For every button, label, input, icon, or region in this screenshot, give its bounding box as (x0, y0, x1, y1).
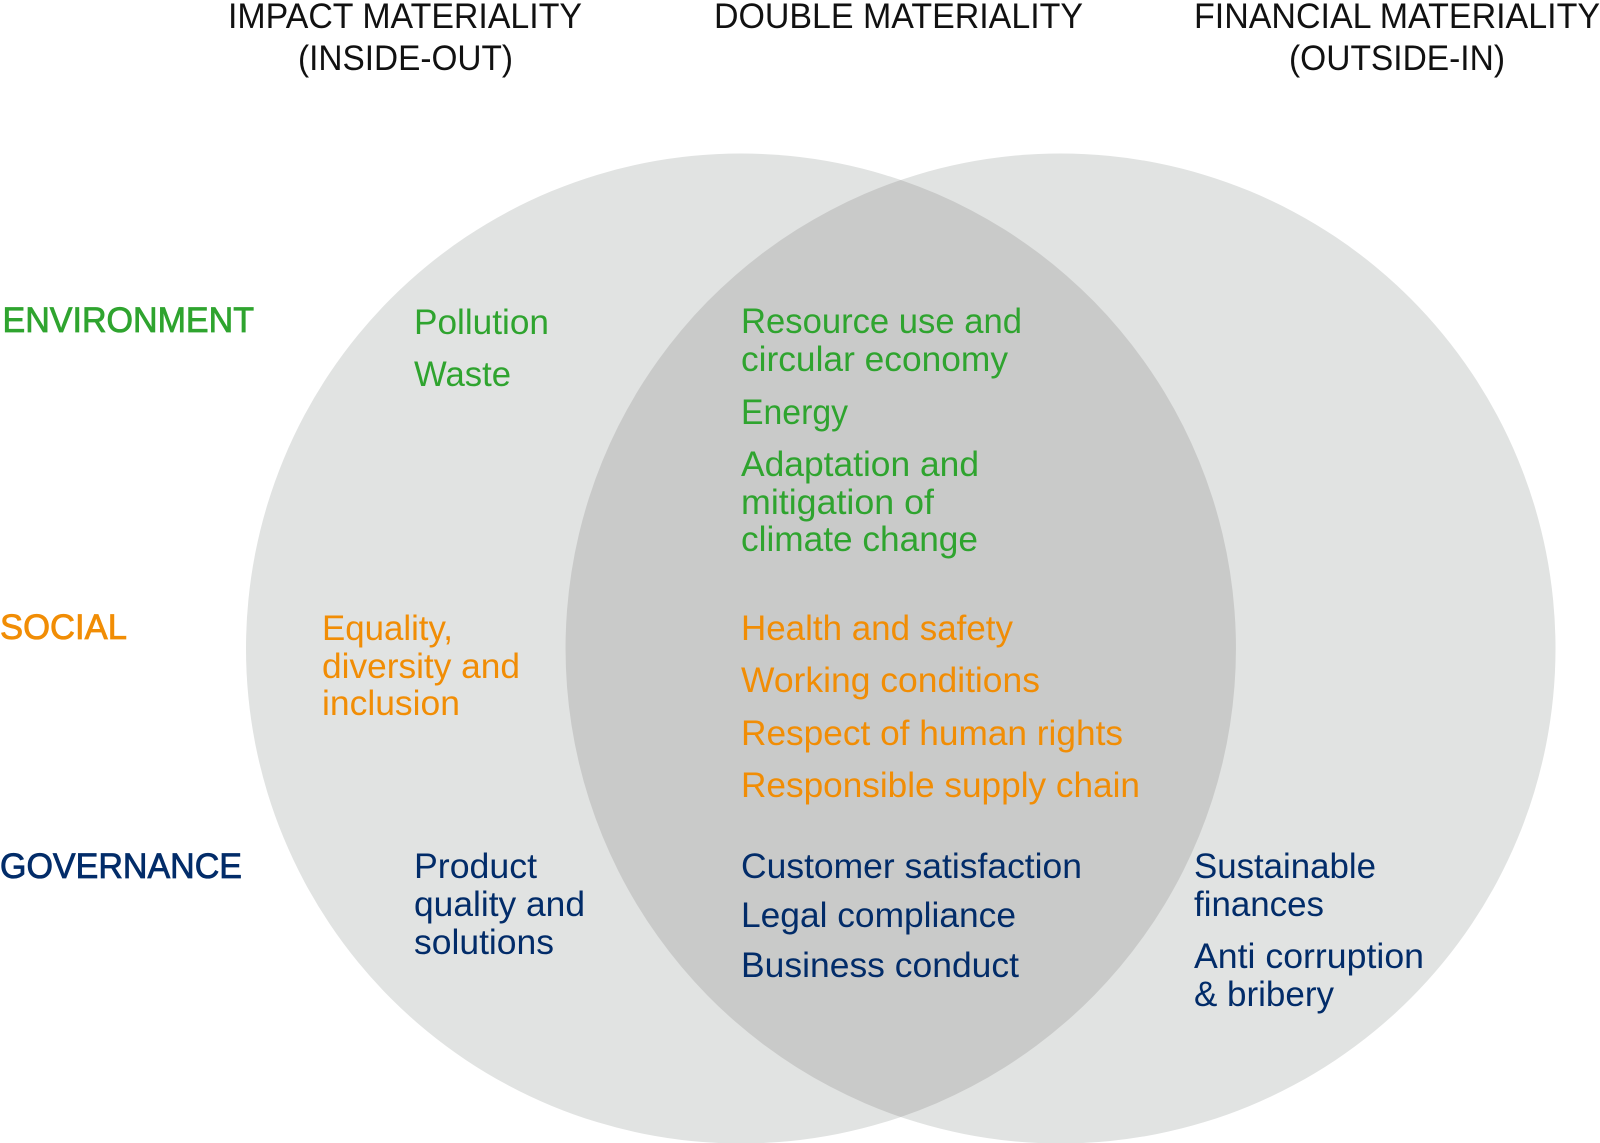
environment items: impact: Pollution (414, 303, 549, 342)
circle: financial materiality (566, 154, 1556, 1143)
row label: social: SOCIAL (0, 608, 127, 647)
governance items: financial: Sustainable (1194, 847, 1376, 886)
environment items: impact: Waste (414, 355, 511, 394)
governance items: financial: Anti corruption (1194, 937, 1424, 976)
social items: double: Responsible supply chain (741, 766, 1140, 805)
governance items: financial (1194, 847, 1424, 1014)
environment items: double: Resource use and (741, 302, 1022, 341)
environment items: double (741, 302, 1022, 559)
column heading: financial materiality (1194, 0, 1600, 78)
environment items: double: Energy (741, 393, 848, 432)
social items: double (741, 609, 1140, 805)
environment items: double: Adaptation and (741, 445, 979, 484)
column heading: impact materiality (228, 0, 582, 78)
social items: impact: inclusion (322, 684, 460, 723)
overlap: double materiality (566, 180, 1236, 1117)
circle: impact materiality (246, 154, 1236, 1143)
environment items: double: mitigation of (741, 483, 934, 522)
governance items: financial: & bribery (1194, 975, 1334, 1014)
environment items: double: climate change (741, 520, 978, 559)
column heading: financial materiality: (OUTSIDE-IN) (1289, 39, 1505, 78)
social items: impact: Equality, (322, 609, 453, 648)
governance items: impact: solutions (414, 923, 554, 962)
governance items: impact (414, 847, 585, 962)
governance items: financial: finances (1194, 885, 1324, 924)
social items: impact: diversity and (322, 647, 520, 686)
governance items: impact: Product (414, 847, 537, 886)
social items: double: Health and safety (741, 609, 1013, 648)
venn diagram (246, 154, 1556, 1143)
governance items: double: Business conduct (741, 946, 1019, 985)
social items: double: Working conditions (741, 661, 1040, 700)
governance items: double (741, 847, 1082, 985)
environment items: impact (414, 303, 549, 394)
environment items: double: circular economy (741, 340, 1008, 379)
governance items: double: Legal compliance (741, 896, 1016, 935)
row label: environment: ENVIRONMENT (2, 301, 254, 340)
social items: double: Respect of human rights (741, 714, 1123, 753)
governance items: double: Customer satisfaction (741, 847, 1082, 886)
column heading: impact materiality: (INSIDE-OUT) (298, 39, 513, 78)
social items: impact (322, 609, 520, 723)
row label: governance: GOVERNANCE (0, 847, 242, 886)
governance items: impact: quality and (414, 885, 585, 924)
